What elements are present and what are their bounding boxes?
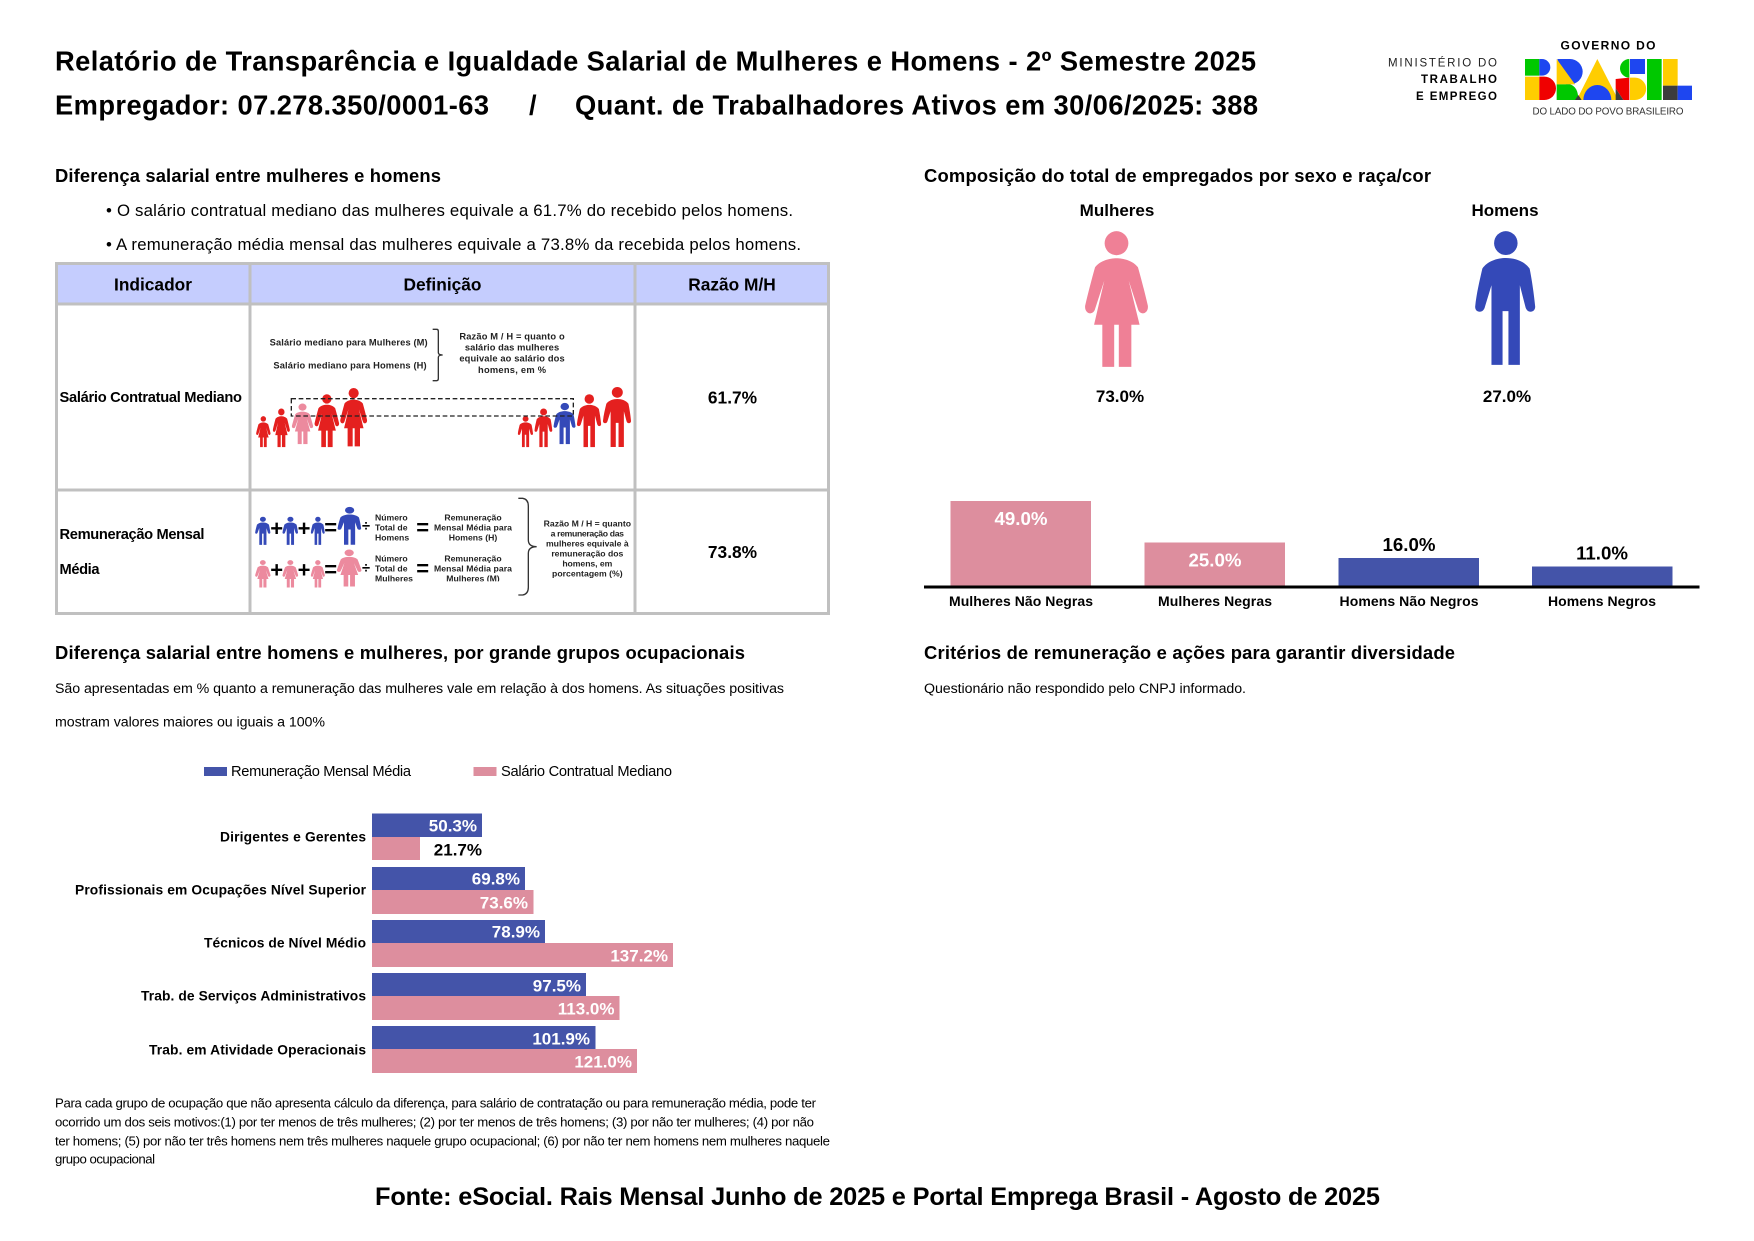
- ministry name: E EMPREGO: [1416, 91, 1497, 103]
- row labels: Remuneração Mensal: [60, 527, 204, 543]
- value labels: [429, 816, 668, 1072]
- mean pay diagram: ÷: [362, 560, 370, 576]
- category labels: [75, 830, 367, 1058]
- bar chart: composition: [924, 501, 1700, 609]
- value labels: 50.3%: [429, 816, 477, 836]
- mean pay diagram: homens, em: [562, 558, 613, 568]
- bar chart: composition: 16.0%: [1383, 534, 1436, 555]
- description: [55, 681, 784, 730]
- value labels: 97.5%: [533, 976, 581, 996]
- bar chart: composition: 49.0%: [995, 508, 1048, 529]
- men figure and share: Homens: [1471, 201, 1539, 220]
- mean pay diagram: +: [298, 557, 310, 582]
- title: Relatório de Transparência e Igualdade Salarial de Mulheres e Homens - 2º Semestre 2025: [55, 46, 1256, 76]
- men figure and share: 27.0%: [1483, 387, 1531, 406]
- value labels: 21.7%: [434, 840, 482, 860]
- bar chart: composition: Homens Negros: [1548, 593, 1656, 609]
- ministry name: [1388, 56, 1497, 103]
- mean pay diagram: =: [416, 515, 429, 540]
- table header: Definição: [404, 274, 482, 294]
- row labels: Salário Contratual Mediano: [60, 390, 242, 406]
- ratio values: 61.7%: [708, 388, 757, 408]
- mean pay diagram: mulheres equivale à: [546, 538, 629, 548]
- mean pay diagram: Mulheres (M): [446, 574, 500, 584]
- bar chart: composition: Homens Não Negros: [1340, 593, 1479, 609]
- bar chart: composition: 25.0%: [1189, 550, 1242, 570]
- mean pay diagram: +: [270, 516, 283, 541]
- heading: Critérios de remuneração e ações para garantir diversidade: [924, 642, 1455, 663]
- mean pay diagram: Homens: [375, 532, 409, 542]
- median salary diagram: salário das mulheres: [465, 343, 559, 353]
- summary bullets: [106, 201, 801, 254]
- title: /: [529, 90, 537, 120]
- ministry name: TRABALHO: [1421, 74, 1497, 86]
- value labels: 78.9%: [492, 922, 540, 942]
- mean pay diagram: Total de: [375, 522, 408, 532]
- mean pay diagram: Remuneração: [444, 553, 502, 563]
- bar chart: composition: Mulheres Negras: [1158, 593, 1272, 609]
- mean pay diagram: +: [298, 516, 310, 541]
- women figure and share: Mulheres: [1080, 201, 1154, 220]
- mean pay diagram: Número: [375, 512, 408, 522]
- summary bullets: • O salário contratual mediano das mulheres equivale a 61.7% do recebido pelos homens.: [106, 201, 793, 220]
- footnote: Para cada grupo de ocupação que não apresenta cálculo da diferença, para salário de contratação ou para remuneração média, pode ter: [55, 1096, 817, 1110]
- table: [56, 264, 828, 614]
- text block: Questionário não respondido pelo CNPJ informado.: [924, 681, 1246, 697]
- mean pay diagram: +: [270, 557, 283, 582]
- heading: Diferença salarial entre homens e mulheres, por grande grupos ocupacionais: [55, 642, 745, 663]
- heading: Diferença salarial entre mulheres e homens: [55, 165, 441, 186]
- mean pay diagram: Remuneração: [444, 512, 502, 522]
- mean pay diagram: ÷: [362, 519, 370, 535]
- title: Empregador: 07.278.350/0001-63: [55, 90, 489, 120]
- median salary diagram: Salário mediano para Mulheres (M): [270, 337, 428, 347]
- legend: Remuneração Mensal Média: [231, 764, 412, 780]
- icon: man: [1475, 231, 1535, 365]
- table header: Razão M/H: [688, 274, 776, 294]
- median salary diagram: homens, em %: [478, 365, 547, 375]
- table header: Indicador: [114, 274, 192, 294]
- logo heading: GOVERNO DO: [1560, 38, 1656, 52]
- value labels: 137.2%: [610, 946, 668, 966]
- value labels: 113.0%: [558, 1000, 614, 1018]
- summary bullets: • A remuneração média mensal das mulheres equivale a 73.8% da recebida pelos homens.: [106, 235, 801, 254]
- panel: remuneration criteria and diversity actions: [924, 642, 1455, 697]
- mean pay diagram: Mulheres: [375, 574, 413, 584]
- footnote: grupo ocupacional: [55, 1152, 155, 1166]
- source footer: Fonte: eSocial. Rais Mensal Junho de 2025 e Portal Emprega Brasil - Agosto de 2025: [375, 1183, 1380, 1211]
- row labels: [60, 390, 242, 578]
- logo: government of Brazil: [1388, 38, 1692, 118]
- panel: salary difference between women and men: [55, 165, 830, 615]
- logo tagline: DO LADO DO POVO BRASILEIRO: [1532, 106, 1684, 118]
- mean pay diagram: Mensal Média para: [434, 564, 512, 574]
- mean pay diagram: [255, 498, 631, 595]
- mean pay diagram: porcentagem (%): [552, 568, 623, 578]
- value labels: 69.8%: [472, 870, 520, 888]
- category labels: Dirigentes e Gerentes: [220, 830, 366, 844]
- panel: workforce composition by sex and race: [924, 165, 1700, 609]
- category labels: Trab. de Serviços Administrativos: [141, 988, 366, 1004]
- mean pay diagram: Total de: [375, 564, 408, 574]
- panel: pay difference by occupational group: [55, 642, 830, 1166]
- median salary diagram: [256, 329, 631, 447]
- value labels: 73.6%: [480, 894, 528, 912]
- median salary diagram: Razão M / H = quanto o: [459, 332, 565, 342]
- description: São apresentadas em % quanto a remuneração das mulheres vale em relação à dos homens. As situações positivas: [55, 681, 784, 697]
- value labels: 121.0%: [574, 1052, 632, 1072]
- mean pay diagram: a remuneração das: [551, 528, 624, 538]
- mean pay diagram: =: [324, 557, 337, 582]
- description: mostram valores maiores ou iguais a 100%: [55, 714, 325, 730]
- mean pay diagram: Homens (H): [449, 532, 497, 542]
- table header: [114, 274, 776, 294]
- value labels: 101.9%: [532, 1030, 590, 1048]
- bar chart: composition: 11.0%: [1576, 542, 1628, 564]
- icon: woman: [1085, 231, 1148, 367]
- mean pay diagram: remuneração dos: [551, 548, 624, 558]
- median salary diagram: equivale ao salário dos: [459, 354, 565, 364]
- row labels: Média: [60, 562, 100, 578]
- mean pay diagram: Número: [375, 553, 408, 563]
- mean pay diagram: Mensal Média para: [434, 522, 512, 532]
- median salary diagram: Salário mediano para Homens (H): [273, 361, 427, 371]
- category labels: Profissionais em Ocupações Nível Superior: [75, 882, 367, 898]
- mean pay diagram: Razão M / H = quanto: [544, 518, 631, 528]
- category labels: Trab. em Atividade Operacionais: [149, 1042, 366, 1058]
- mean pay diagram: =: [324, 515, 337, 540]
- legend: [204, 764, 672, 780]
- footnote: ocorrido um dos seis motivos:(1) por ter menos de três mulheres; (2) por ter menos de três homens; (3) por não ter mulheres; (4) por não: [55, 1114, 814, 1130]
- ratio values: 73.8%: [708, 542, 757, 562]
- title: [55, 46, 1258, 120]
- men figure and share: [1471, 201, 1539, 406]
- legend: Salário Contratual Mediano: [501, 764, 672, 780]
- heading: Composição do total de empregados por sexo e raça/cor: [924, 165, 1431, 186]
- women figure and share: [1080, 201, 1154, 406]
- category labels: Técnicos de Nível Médio: [204, 936, 366, 950]
- ratio values: [708, 388, 757, 562]
- bar chart: occupational groups: [75, 814, 673, 1073]
- footnote: ter homens; (5) por não ter três homens nem três mulheres naquele grupo ocupacional; (6) por não ter nem homens nem mulheres naquele: [55, 1134, 830, 1148]
- mean pay diagram: =: [416, 556, 429, 581]
- ministry name: MINISTÉRIO DO: [1388, 56, 1497, 70]
- women figure and share: 73.0%: [1096, 387, 1144, 406]
- bar chart: composition: Mulheres Não Negras: [949, 593, 1093, 609]
- title: Quant. de Trabalhadores Ativos em 30/06/2025: 388: [575, 90, 1258, 120]
- footnote: [55, 1096, 830, 1166]
- logo: BRASIL coloured letters: [1525, 59, 1692, 100]
